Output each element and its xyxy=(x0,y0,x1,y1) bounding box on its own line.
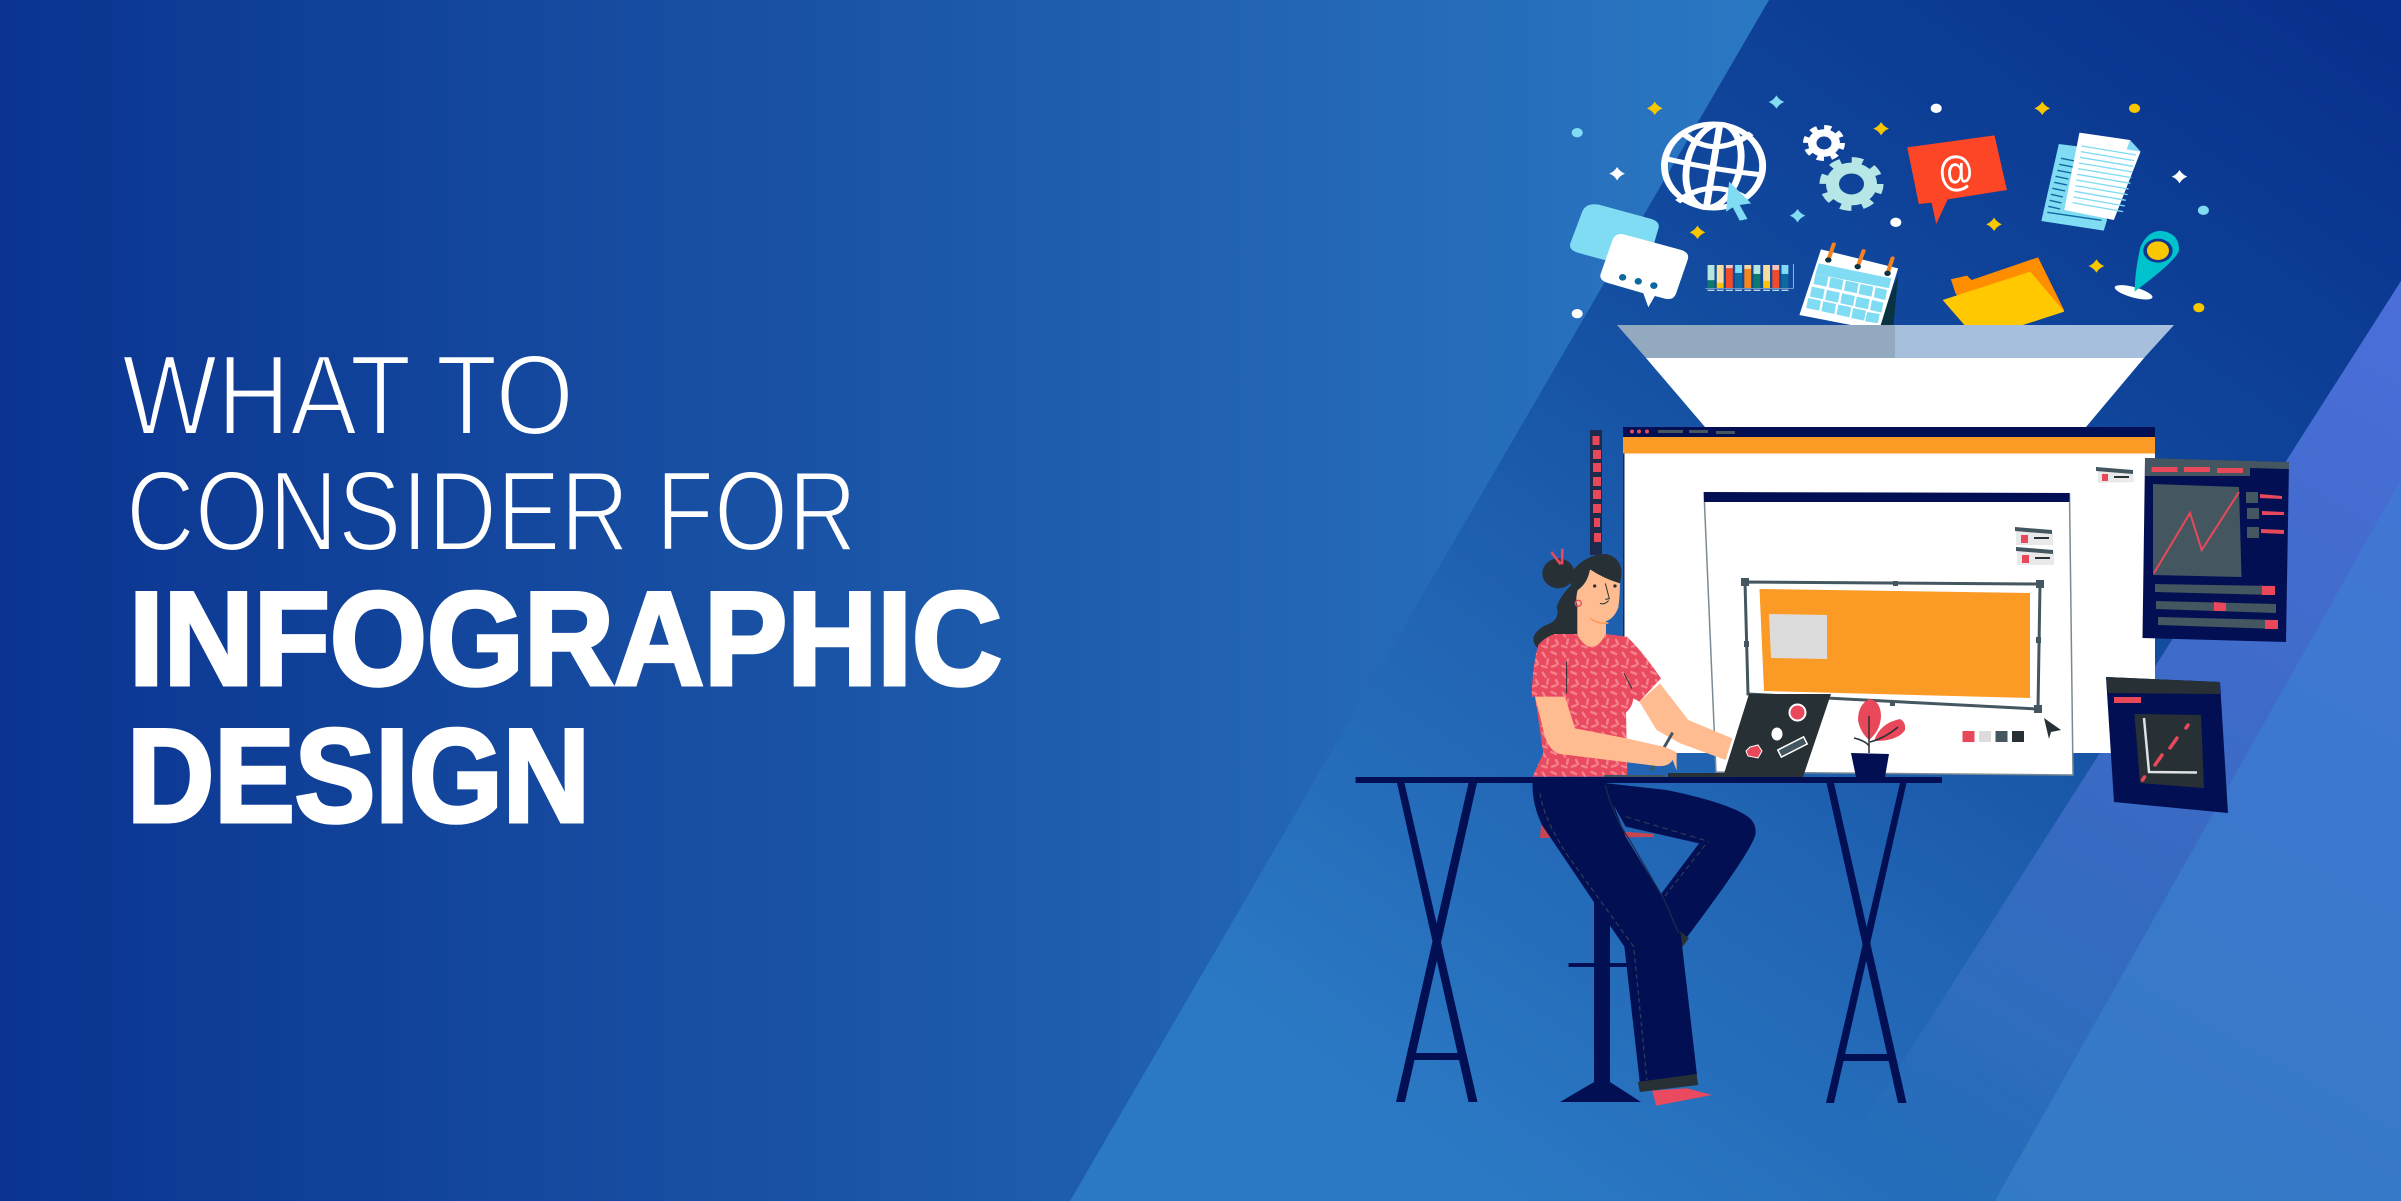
heading line: CONSIDER FOR: CONSIDER FOR xyxy=(126,448,857,576)
canvas window xyxy=(1704,492,2073,775)
jeans cuff xyxy=(1638,1074,1698,1092)
icon: speech bubble with @ xyxy=(1907,135,2007,224)
grey placeholder xyxy=(1769,614,1827,659)
floating icons above funnel xyxy=(1570,95,2209,325)
window title bar xyxy=(1623,427,2155,437)
heading line: WHAT TO: WHAT TO xyxy=(122,332,574,460)
drawing pen xyxy=(1651,733,1673,771)
title xyxy=(122,332,1002,850)
cursor arrow xyxy=(2044,718,2061,739)
colour swatches xyxy=(1962,731,2024,742)
small layer widget xyxy=(2096,467,2134,483)
icon: globe with cursor xyxy=(1664,122,1763,221)
orange artboard xyxy=(1760,589,2030,698)
icon: documents xyxy=(2041,133,2141,231)
icon: chat bubbles xyxy=(1570,204,1688,307)
person: legs xyxy=(1533,783,1756,1106)
neck and face xyxy=(1575,569,1620,647)
table xyxy=(1356,777,1942,1103)
selection frame xyxy=(1741,578,2044,713)
icon: calendar xyxy=(1799,244,1898,325)
panel: axis preview xyxy=(2106,677,2228,813)
hair front xyxy=(1571,554,1622,592)
right trestle xyxy=(1826,783,1906,1103)
stool xyxy=(1540,825,1654,1102)
panel: chart controls xyxy=(2142,458,2289,642)
hair back and bun xyxy=(1533,549,1580,651)
front leg xyxy=(1533,783,1697,1083)
heading line: INFOGRAPHIC: INFOGRAPHIC xyxy=(129,566,1002,714)
sparkles and dots xyxy=(1572,95,2209,318)
left trestle xyxy=(1396,783,1478,1102)
icon: speech bubble with @: @ xyxy=(1934,147,1977,196)
icon: small gear xyxy=(1806,128,1842,158)
icon: stacked bar chart xyxy=(1705,264,1793,290)
person: upper body xyxy=(1532,549,1732,777)
back leg xyxy=(1601,783,1756,949)
icon: large gear xyxy=(1824,161,1879,207)
arm with pen xyxy=(1535,697,1677,771)
layer widgets xyxy=(2015,527,2054,565)
arm at laptop xyxy=(1639,683,1732,760)
laptop xyxy=(1604,694,1831,777)
heading line: DESIGN: DESIGN xyxy=(127,702,590,850)
funnel xyxy=(1617,325,2174,427)
browser window xyxy=(1623,427,2155,753)
shoe xyxy=(1652,1088,1712,1106)
laptop stickers xyxy=(1746,704,1807,758)
vertical toolbar xyxy=(1590,430,1602,555)
shirt xyxy=(1532,634,1661,777)
icon: map pin xyxy=(2112,231,2179,302)
icon: folder xyxy=(1943,257,2064,325)
plant xyxy=(1851,699,1905,777)
